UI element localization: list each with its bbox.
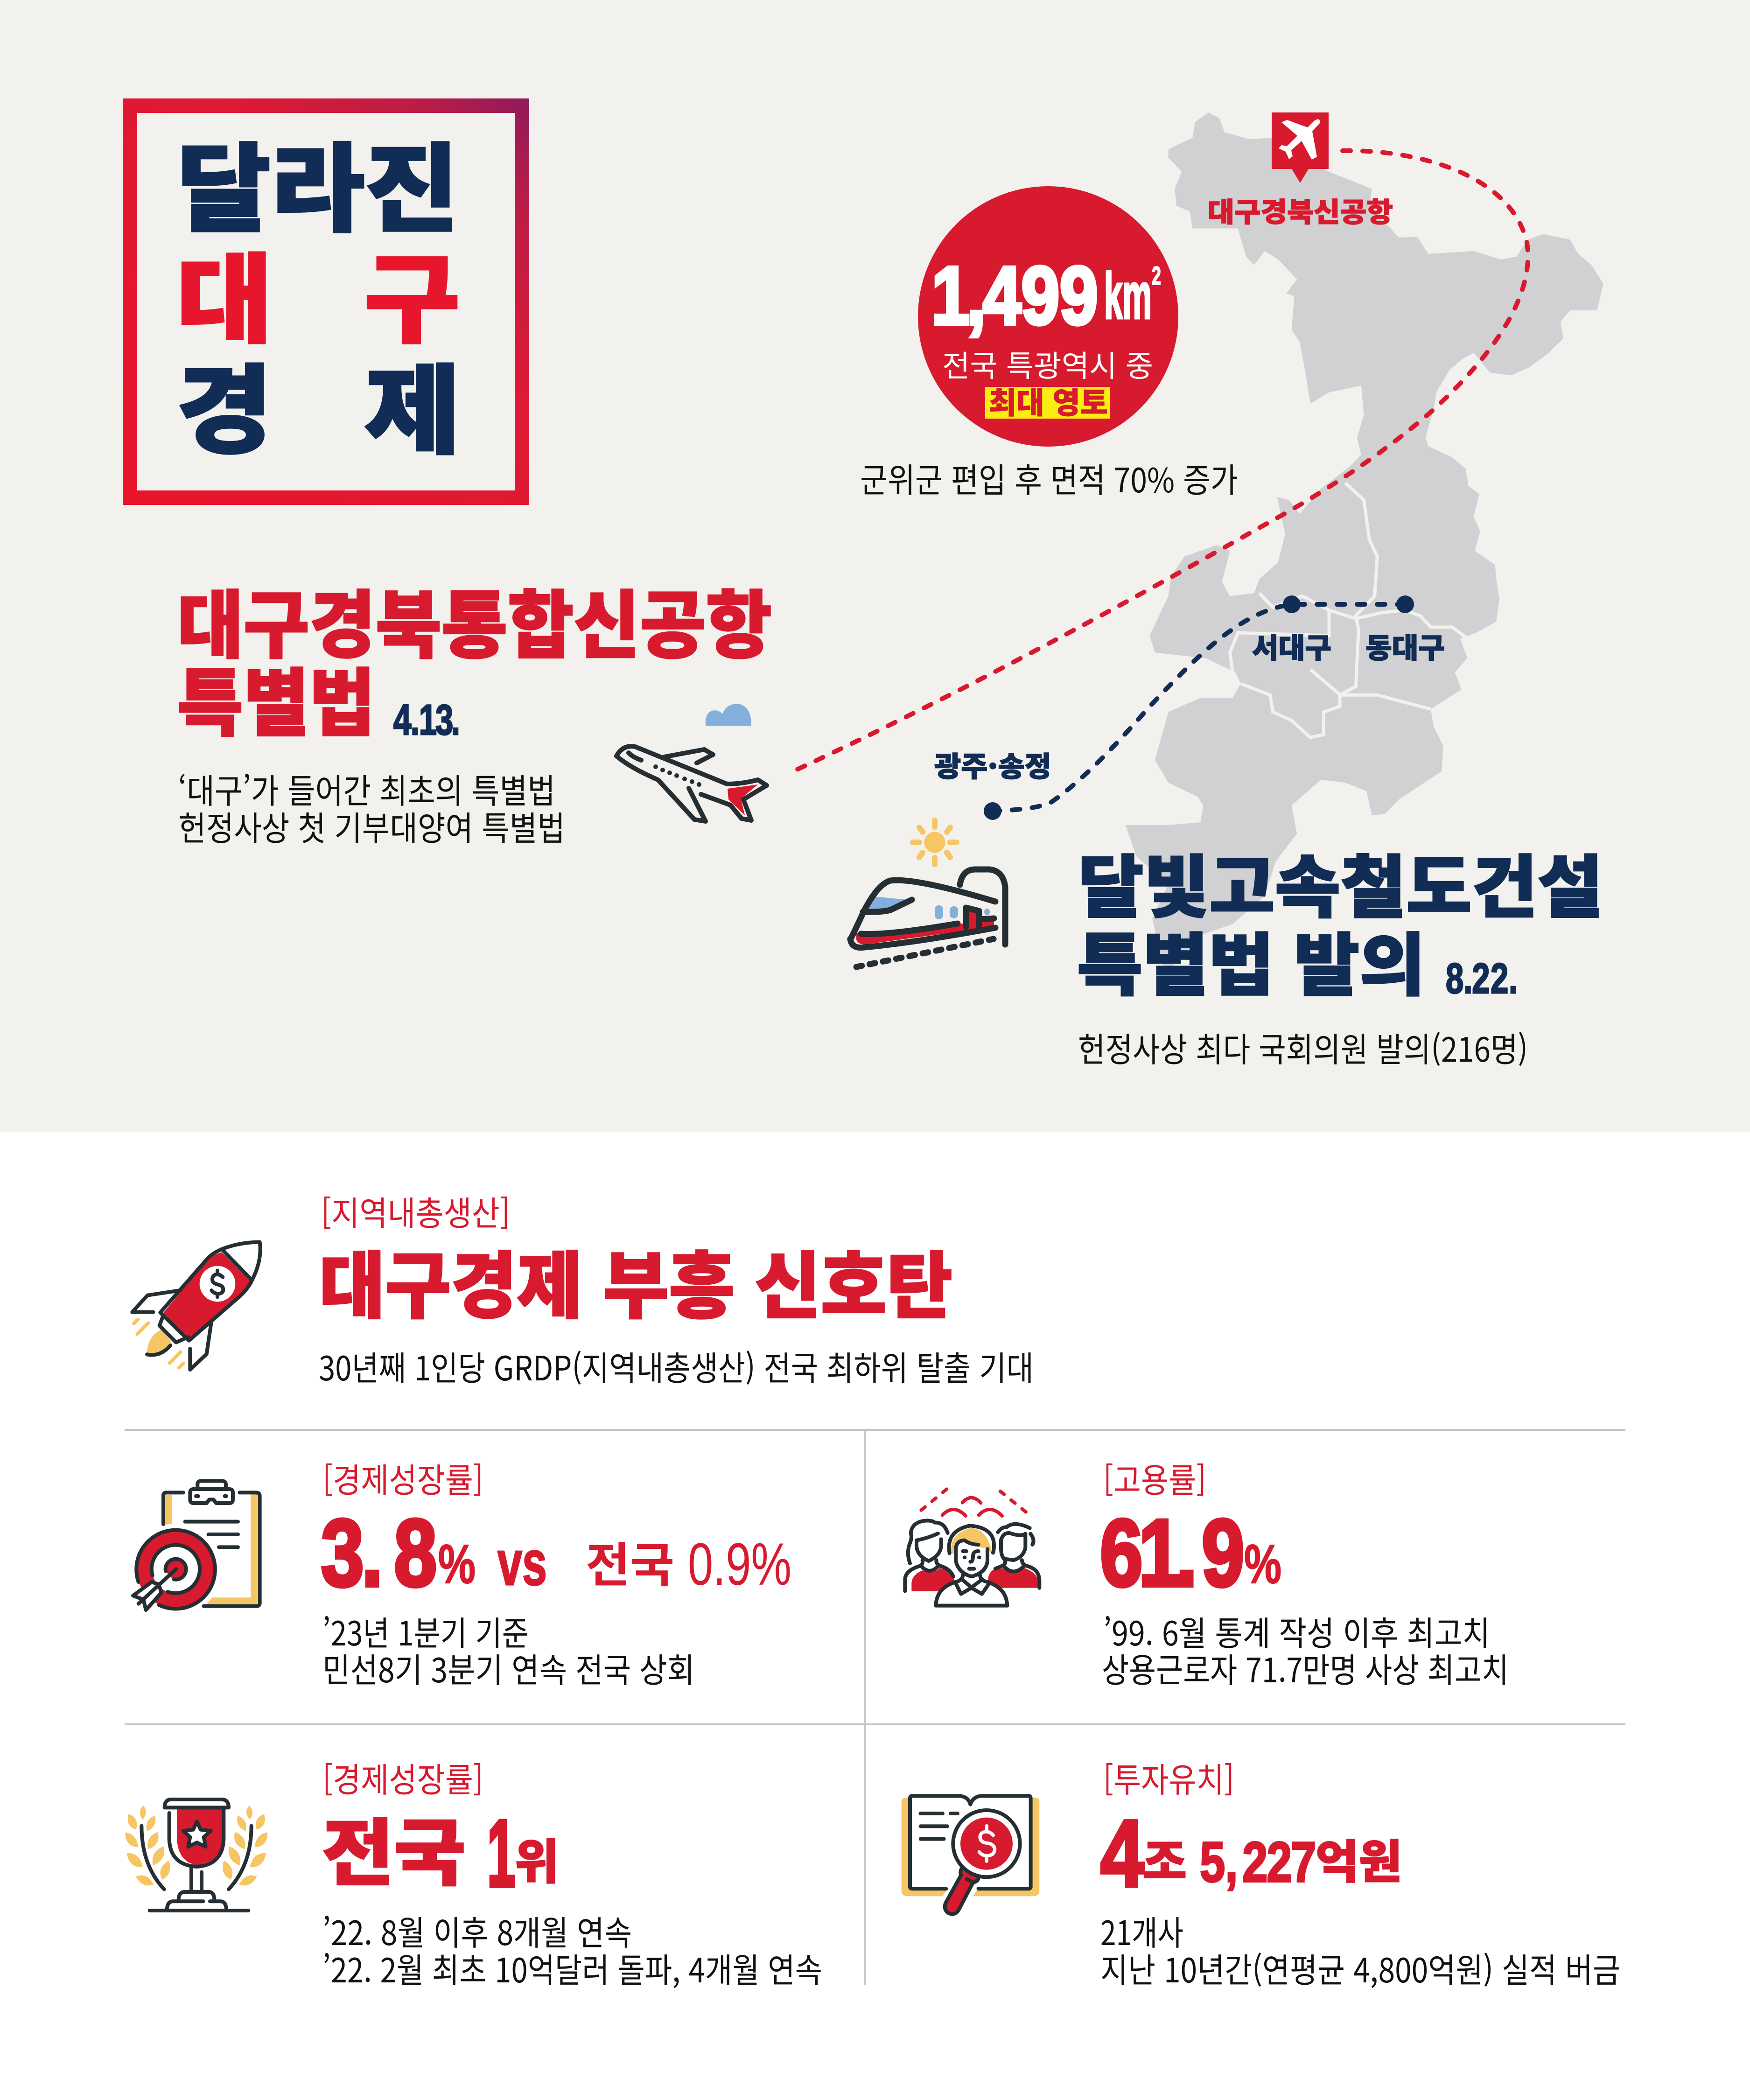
text: rank note: ’22. 8월 이후 8개월 연속 [322,1906,632,1955]
text: growth note: ’23년 1분기 기준 [322,1606,529,1655]
text: employment note: 상용근로자 71.7만명 사상 최고치 [1102,1643,1509,1692]
tag: 경제성장률: [경제성장률] [322,1453,483,1502]
number: 전국 1위: 위 [515,1824,559,1893]
number: 3.8%: % [438,1533,476,1595]
map: Daegu region [1126,112,1603,975]
text: airport law description: 헌정사상 첫 기부대양여 특별법 [178,801,565,850]
number: 4조 5,227억원: 조 [1143,1825,1187,1891]
icon: rocket [132,1242,260,1370]
tag: 지역내총생산: [지역내총생산] [321,1186,510,1235]
panel: growth rate vs national [321,1453,791,1692]
panel: top background [0,0,1750,1132]
callout: area circle [918,186,1178,447]
title: 대구: 대 [176,222,273,362]
label: vs: vs [497,1527,547,1598]
text: airport law description: ‘대구’가 들어간 최초의 특별법 [178,764,555,813]
label: 동대구: 동대구 [1365,626,1445,666]
number: 61.9%: 61.9 [1100,1500,1245,1606]
number: 전국 1위: 전국 [322,1794,466,1900]
text: employment note: ’99. 6월 통계 작성 이후 최고치 [1103,1606,1490,1655]
panel: bottom background [0,1132,1750,2100]
text: investment note: 지난 10년간(연평균 4,800억원) 실적 버금 [1100,1943,1620,1992]
icon: airplane [616,746,767,821]
highlight: 최대 영토: 최대 영토 [989,379,1108,422]
number: 4조 5,227억원: 5,227 [1200,1831,1316,1894]
title: 대구: 구 [364,222,460,362]
text: investment note [1100,1906,1620,1992]
panel: growth rank [322,1753,822,1992]
title frame [130,105,522,497]
route: navy dashed rail line [984,595,1414,820]
tag: 고용률: [고용률] [1103,1453,1206,1502]
text: 전국 특광역시 중: 전국 특광역시 중 [942,343,1153,385]
number: 4조 5,227억원: 4 [1100,1800,1144,1907]
icon: trophy [125,1799,267,1911]
heading: 달빛고속철도건설 특별법 발의: 특별법 발의 [1077,911,1425,1009]
heading: 대구경북통합신공항 특별법 [177,566,772,751]
icon: clipboard target [133,1481,260,1610]
number: 전국 1위: 1 [487,1800,515,1907]
date: 4.13.: 4.13. [393,696,460,744]
title: 대구 [176,222,460,362]
heading: 대구경제 부흥 신호탄: 대구경제 부흥 신호탄 [319,1227,952,1333]
tag: 투자유치: [투자유치] [1103,1753,1234,1802]
text: airport law description [178,764,565,850]
text: investment note: 21개사 [1100,1906,1183,1955]
label: 대구경북신공항: 대구경북신공항 [1208,190,1393,230]
heading: 대구경북통합신공항 특별법: 대구경북통합신공항 [177,566,772,673]
title: 경제: 경 [176,333,273,473]
text: rail law description: 헌정사상 최다 국회의원 발의(216명) [1078,1022,1528,1071]
date: 8.22.: 8.22. [1446,954,1518,1002]
title: 경제: 제 [364,333,461,473]
dividers [125,1430,1625,1985]
icon: sun [913,820,957,864]
text: 군위군 편입 후 면적 70% 증가: 군위군 편입 후 면적 70% 증가 [860,453,1238,502]
number: 3.8%: 3.8 [321,1500,437,1606]
number: 4조 5,227억원: 억원 [1316,1825,1402,1891]
number: 전국 0.9% [586,1527,791,1598]
icon: high-speed train [850,869,1005,967]
text: rank note: ’22. 2월 최초 10억달러 돌파, 4개월 연속 [322,1943,822,1992]
title: 달라진: 달라진 [177,112,459,251]
icon: cloud [706,704,751,726]
tag: 경제성장률: [경제성장률] [322,1753,483,1802]
section: GRDP headline [319,1186,1034,1390]
number: 1,499 km2: 1,499 [931,250,1098,342]
heading: 달빛고속철도건설 특별법 발의: 달빛고속철도건설 [1078,833,1603,931]
route: red dashed flight path [791,151,1528,772]
text: growth note [322,1606,695,1692]
text: employment note [1102,1606,1509,1692]
panel: investment [1100,1753,1620,1992]
text: GRDP description: 30년째 1인당 GRDP(지역내총생산) 전국 최하위 탈출 기대 [319,1341,1034,1390]
text: growth note: 민선8기 3분기 연속 전국 상회 [322,1643,695,1692]
number: 61.9%: % [1244,1533,1281,1595]
panel: employment rate [1100,1453,1509,1692]
heading: 대구경북통합신공항 특별법: 특별법 [177,644,375,751]
icon: book magnifier [902,1796,1039,1914]
number: 1,499 km2: km [1104,259,1152,332]
icon: people [905,1485,1039,1606]
number: 전국 0.9%: 0.9% [688,1531,791,1598]
number: 4조 5,227억원 [1100,1800,1402,1907]
number: 전국 0.9%: 전국 [586,1527,674,1596]
heading: 달빛고속철도건설 특별법 발의 [1077,833,1603,1009]
icon: airport pin [1272,112,1329,183]
title: 경제 [176,333,461,473]
number: 전국 1위 [322,1794,559,1907]
text: rank note [322,1906,822,1992]
label: 광주·송정: 광주·송정 [934,744,1051,785]
label: 서대구: 서대구 [1252,626,1331,666]
number: 1,499 km2: 2 [1152,261,1161,290]
